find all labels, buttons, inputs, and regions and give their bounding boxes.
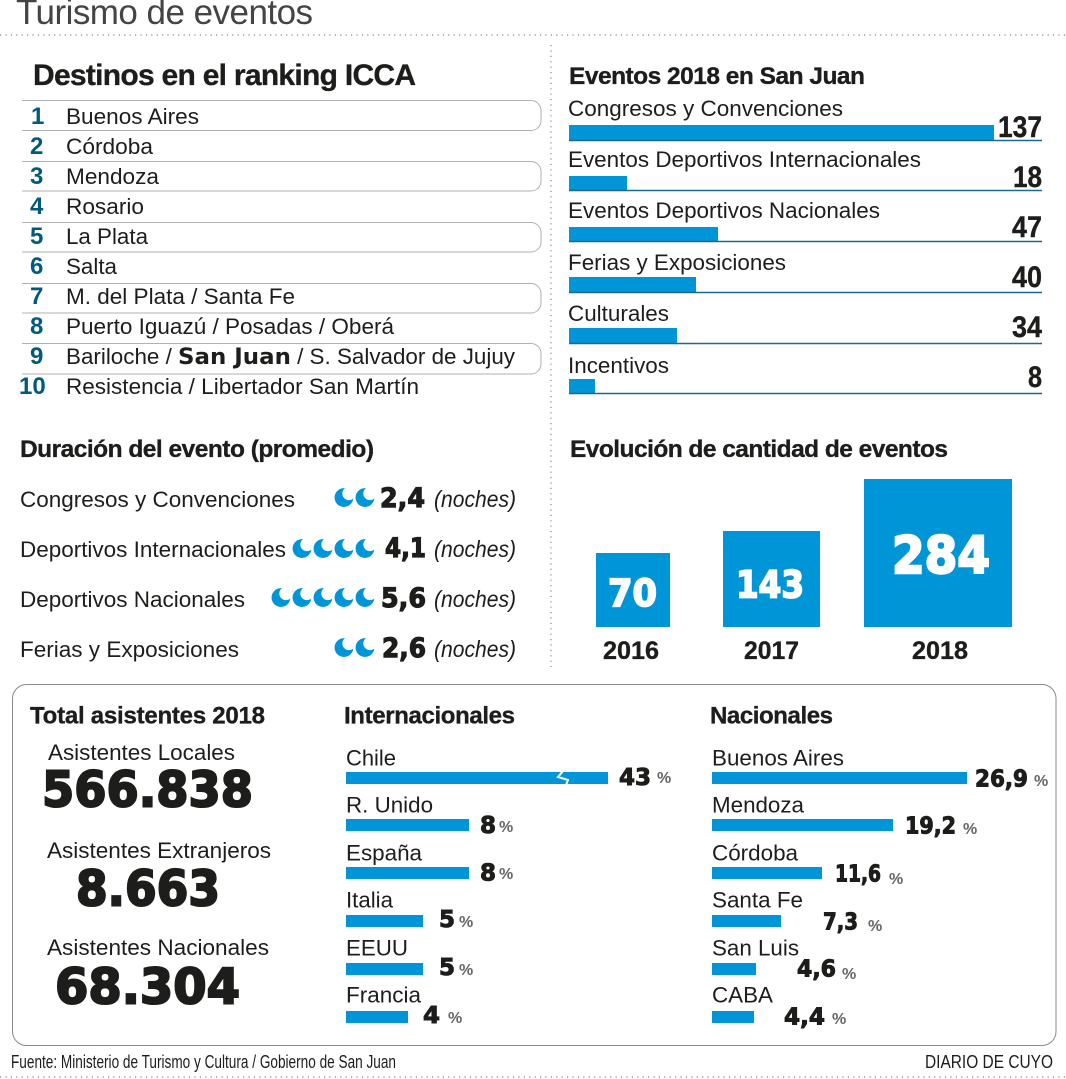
square: 2017: 2017 xyxy=(744,637,799,665)
panel: eventos 2018 xyxy=(568,63,1042,394)
bar: chile: 43 xyxy=(619,763,651,791)
square: 2017: 143 xyxy=(736,564,804,606)
heading: duracion: Duración del evento (promedio) xyxy=(20,436,374,463)
bar: francia: 4 xyxy=(423,1001,440,1029)
ranking list: Buenos Aires xyxy=(66,104,199,129)
bar: ferias xyxy=(568,250,1042,294)
bar: cordoba: 11,6 xyxy=(835,860,881,888)
panel: asistentes xyxy=(12,684,1056,1046)
bar: deportivos internacionales: Eventos Deportivos Internacionales xyxy=(568,147,921,172)
row: congresos xyxy=(20,483,516,514)
bar: san luis: San Luis xyxy=(712,936,799,960)
stat: nacionales xyxy=(47,935,269,1016)
ranking list: Rosario xyxy=(66,194,144,219)
row: deportivos internacionales: (noches) xyxy=(434,536,516,562)
ranking list: Salta xyxy=(66,254,118,279)
bar: cordoba: % xyxy=(889,871,903,888)
heading: eventos: Eventos 2018 en San Juan xyxy=(569,63,865,90)
bar: culturales xyxy=(568,301,1042,344)
row: ferias: 2,6 xyxy=(382,633,426,664)
nacionales chart: Nacionales xyxy=(710,702,833,730)
bar: congresos xyxy=(568,96,1042,144)
square: 2016: 2016 xyxy=(603,637,659,665)
ranking list: 6 xyxy=(30,253,43,280)
bar: deportivos nacionales xyxy=(568,198,1042,244)
bar: buenos aires: Buenos Aires xyxy=(712,746,844,770)
bar: san luis: % xyxy=(842,966,856,983)
bar: r unido: R. Unido xyxy=(346,792,433,818)
row: ferias: Ferias y Exposiciones xyxy=(20,637,239,662)
ranking list xyxy=(19,103,515,400)
footer: source: Fuente: Ministerio de Turismo y Cultura / Gobierno de San Juan xyxy=(11,1052,396,1072)
ranking list: La Plata xyxy=(66,224,149,249)
bar: francia xyxy=(346,982,462,1029)
stat: nacionales: 68.304 xyxy=(55,958,240,1016)
row: deportivos internacionales: 4,1 xyxy=(385,533,426,564)
bar: deportivos nacionales: 47 xyxy=(1012,211,1042,244)
ranking list: Bariloche / San Juan / S. Salvador de Jujuy xyxy=(66,344,515,370)
bar: chile: % xyxy=(657,770,671,787)
row: deportivos nacionales: (noches) xyxy=(434,586,516,612)
panel: evolucion de eventos xyxy=(570,436,1012,665)
row: deportivos nacionales: Deportivos Nacionales xyxy=(20,587,245,612)
bar: r unido: 8 xyxy=(480,811,496,839)
ranking list: 3 xyxy=(30,163,43,190)
ranking list: Mendoza xyxy=(66,164,160,189)
ranking list: 2 xyxy=(30,133,43,160)
bar: incentivos: Incentivos xyxy=(568,353,669,378)
panel: ranking ICCA xyxy=(19,59,541,400)
bar: mendoza: Mendoza xyxy=(712,792,805,818)
bar: santa fe: % xyxy=(868,918,882,935)
ranking list: 8 xyxy=(30,313,43,340)
internacionales chart: Internacionales xyxy=(344,702,515,730)
bar: ferias: 40 xyxy=(1012,261,1042,294)
bar: santa fe xyxy=(712,888,882,936)
heading: ranking: Destinos en el ranking ICCA xyxy=(33,59,416,92)
square: 2018 xyxy=(864,479,1012,665)
bar: mendoza: 19,2 xyxy=(905,812,956,840)
bar: espana: 8 xyxy=(480,858,496,886)
square: 2018: 284 xyxy=(892,527,990,586)
row: ferias xyxy=(20,633,516,664)
bar: congresos: Congresos y Convenciones xyxy=(568,96,843,121)
heading: evolucion: Evolución de cantidad de eventos xyxy=(570,436,948,463)
stat: locales xyxy=(42,740,253,818)
bar: buenos aires: 26,9 xyxy=(975,764,1028,792)
row: deportivos nacionales: 5,6 xyxy=(381,583,426,614)
bar: r unido: % xyxy=(499,819,513,836)
ranking list: 4 xyxy=(30,193,44,220)
bar: culturales: Culturales xyxy=(568,301,669,326)
square: 2016 xyxy=(596,553,670,665)
ranking list: 10 xyxy=(19,373,46,400)
row: congresos: Congresos y Convenciones xyxy=(20,487,295,512)
square: 2018: 2018 xyxy=(912,637,968,665)
bar: italia xyxy=(346,888,473,933)
bar: caba: % xyxy=(832,1011,846,1028)
row: congresos: 2,4 xyxy=(380,483,425,514)
bar: italia: Italia xyxy=(346,888,394,912)
bar: cordoba: Córdoba xyxy=(712,840,799,866)
bar: deportivos internacionales xyxy=(568,147,1042,194)
bar: congresos: 137 xyxy=(998,111,1042,144)
bar: incentivos xyxy=(568,353,1042,394)
bar: santa fe: Santa Fe xyxy=(712,888,803,912)
square: 2017 xyxy=(723,531,820,665)
total asistentes xyxy=(30,702,271,1016)
nacionales chart xyxy=(710,702,1048,1030)
bar: eeuu xyxy=(346,936,473,981)
bar: caba: CABA xyxy=(712,982,773,1008)
bar: francia: Francia xyxy=(346,982,422,1008)
stat: extranjeros: 8.663 xyxy=(76,860,220,918)
stat: extranjeros xyxy=(47,838,271,918)
ranking list: 7 xyxy=(30,283,43,310)
stat: nacionales: Asistentes Nacionales xyxy=(47,935,269,960)
bar: italia: 5 xyxy=(439,905,455,933)
bar: buenos aires: % xyxy=(1034,773,1048,790)
bar: cordoba xyxy=(712,840,903,888)
row: ferias: (noches) xyxy=(434,636,516,662)
ranking list: 5 xyxy=(30,223,43,250)
bar: deportivos internacionales: 18 xyxy=(1013,161,1042,194)
bar: chile: Chile xyxy=(346,746,396,770)
bar: eeuu: EEUU xyxy=(346,936,408,960)
bar: santa fe: 7,3 xyxy=(823,908,858,936)
row: deportivos internacionales: Deportivos Internacionales xyxy=(20,537,286,562)
bar: incentivos: 8 xyxy=(1028,361,1042,394)
panel: duracion del evento xyxy=(20,436,516,664)
bar: chile xyxy=(346,746,671,791)
ranking list: Córdoba xyxy=(66,134,154,159)
ranking list: M. del Plata / Santa Fe xyxy=(66,284,295,309)
bar: italia: % xyxy=(459,914,473,931)
internacionales chart xyxy=(344,702,671,1029)
bar: buenos aires xyxy=(712,746,1048,792)
bar: mendoza: % xyxy=(963,821,977,838)
bar: ferias: Ferias y Exposiciones xyxy=(568,250,786,275)
bar: san luis xyxy=(712,936,856,983)
bar: caba: 4,4 xyxy=(784,1002,825,1030)
bar: francia: % xyxy=(448,1010,462,1027)
bar: espana: España xyxy=(346,840,423,866)
stat: locales: Asistentes Locales xyxy=(48,740,235,765)
row: deportivos nacionales xyxy=(20,583,516,614)
stat: extranjeros: Asistentes Extranjeros xyxy=(47,838,271,863)
ranking list: Puerto Iguazú / Posadas / Oberá xyxy=(66,314,395,339)
bar: mendoza xyxy=(712,792,977,840)
bar: eeuu: % xyxy=(459,962,473,979)
bar: culturales: 34 xyxy=(1012,311,1042,344)
ranking list: Resistencia / Libertador San Martín xyxy=(66,374,419,399)
row: congresos: (noches) xyxy=(434,486,516,512)
stat: locales: 566.838 xyxy=(42,762,253,818)
row: deportivos internacionales xyxy=(20,533,516,564)
ranking list: 9 xyxy=(30,343,43,370)
bar: caba xyxy=(712,982,846,1030)
bar: r unido xyxy=(346,792,513,839)
bar: espana: % xyxy=(499,866,513,883)
square: 2016: 70 xyxy=(608,572,657,615)
bar: deportivos nacionales: Eventos Deportivos Nacionales xyxy=(568,198,880,223)
bar: eeuu: 5 xyxy=(439,953,455,981)
ranking list: 1 xyxy=(31,103,44,130)
total asistentes: Total asistentes 2018 xyxy=(30,702,265,730)
bar: espana xyxy=(346,840,513,886)
bar: san luis: 4,6 xyxy=(797,954,836,982)
